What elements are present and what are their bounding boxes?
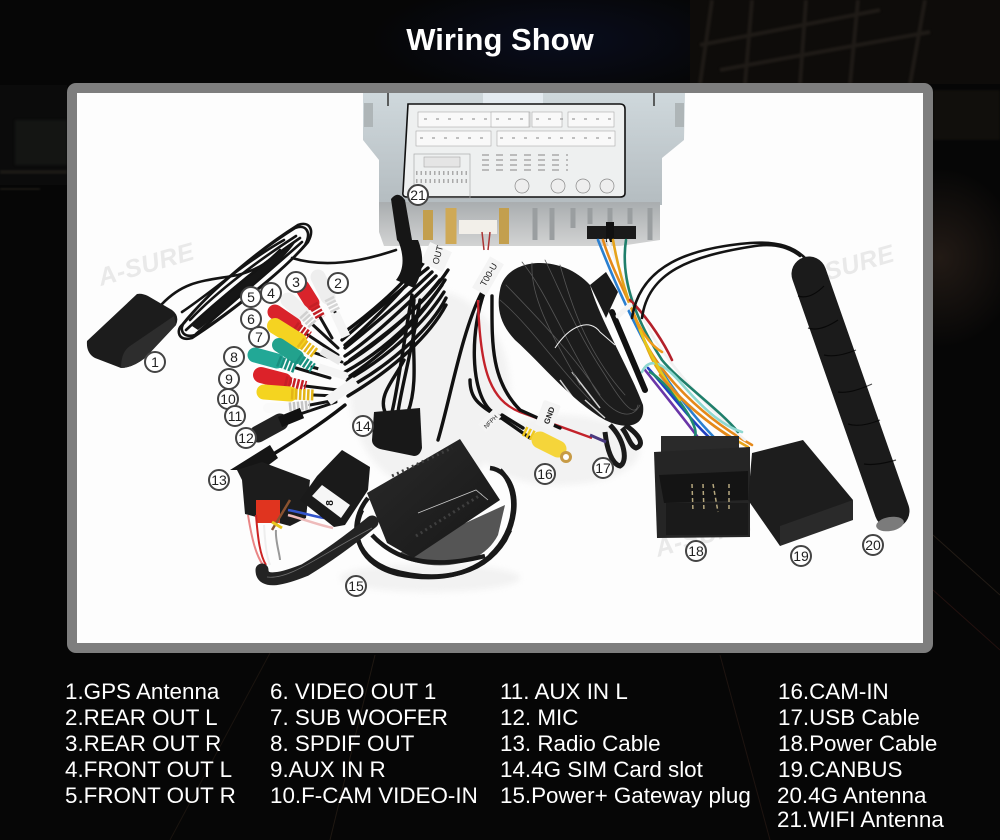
legend column 4: 19.CANBUS: [778, 757, 902, 782]
numbered badges: 17: [595, 460, 611, 476]
numbered badges: 10: [220, 391, 236, 407]
legend column 2: 8. SPDIF OUT: [270, 731, 415, 756]
legend column 1: 2.REAR OUT L: [65, 705, 218, 730]
legend column 1: [65, 679, 236, 808]
white plug cluster: [459, 220, 497, 250]
numbered badges: 11: [228, 408, 242, 424]
legend column 1: 3.REAR OUT R: [65, 731, 221, 756]
legend column 3: 13. Radio Cable: [500, 731, 661, 756]
legend column 3: 15.Power+ Gateway plug: [500, 783, 751, 808]
4G antenna foam stick (20): [798, 274, 905, 533]
numbered badges: 5: [247, 289, 255, 305]
watermarks: [94, 237, 898, 563]
label tag: OUT: OUT: [431, 244, 445, 265]
gateway coiled cable and box (15): [262, 439, 514, 579]
numbered badges: 7: [255, 329, 263, 345]
plug 6: yellow: [275, 326, 316, 354]
harness label tag T00-U: T00-U: [478, 261, 499, 288]
RCA plugs and mic jack: [255, 277, 359, 434]
watermarks: A-SURE: [94, 237, 198, 292]
legend column 1: 1.GPS Antenna: [65, 679, 220, 704]
CANBUS box (19): [748, 440, 853, 546]
numbered badges: 8: [230, 349, 238, 365]
legend column 4: 18.Power Cable: [778, 731, 937, 756]
watermarks: A-SURE: [651, 508, 755, 563]
legend column 2: 7. SUB WOOFER: [270, 705, 448, 730]
USB cable coil (17): [499, 260, 643, 466]
power cable connector (18): [654, 436, 750, 538]
harness label tag T00-U: [472, 256, 504, 296]
main harness cable bundle: [342, 240, 452, 396]
head unit: [363, 93, 685, 250]
gateway plug block with white 8 label: 8: [325, 500, 336, 506]
plug 11: white: [268, 405, 310, 408]
NFPH label: NFPH: [484, 415, 499, 430]
numbered badges: 12: [238, 430, 254, 446]
SIM card slot box and its cables (14): [372, 295, 422, 456]
legend column 1: 5.FRONT OUT R: [65, 783, 236, 808]
legend column 4: [777, 679, 944, 832]
plug 7: teal: [279, 345, 313, 368]
label tag: OUT: [421, 242, 452, 272]
GND label: GND: [542, 405, 557, 425]
numbered badges: 14: [355, 418, 371, 434]
numbered badges: 21: [410, 187, 426, 203]
numbered badges: 3: [292, 274, 300, 290]
legend column 3: 12. MIC: [500, 705, 578, 730]
numbered badges: [145, 185, 883, 596]
legend column 3: [500, 679, 751, 808]
watermarks: A-SURE: [794, 239, 898, 294]
plug 12: mic jack: [258, 413, 302, 434]
long thin cables to camera input: [438, 256, 592, 440]
legend column 4: 16.CAM-IN: [778, 679, 889, 704]
rear connector panel: [379, 202, 660, 246]
legend column 1: 4.FRONT OUT L: [65, 757, 232, 782]
WiFi antenna cables to 4G antenna: [632, 243, 805, 318]
white labels on the RCA leads: [317, 311, 359, 405]
legend column 3: 14.4G SIM Card slot: [500, 757, 704, 782]
numbered badges: 19: [793, 548, 809, 564]
plug 8: teal: [255, 355, 296, 368]
numbered badges: 6: [247, 311, 255, 327]
camera input RCA (16): [478, 400, 572, 463]
title: Wiring Show: [406, 22, 595, 57]
plug 4: white: [288, 300, 313, 325]
panel: wiring photo frame: [67, 83, 933, 653]
radio cable connector block (13): [230, 445, 333, 565]
plug 3: red: [302, 287, 321, 318]
gateway plug block with white 8 label: [300, 450, 370, 527]
numbered badges: 18: [688, 543, 704, 559]
numbered badges: 13: [211, 472, 227, 488]
black harness socket: [587, 222, 636, 242]
legend column 4: 21.WIFI Antenna: [777, 807, 944, 832]
numbered badges: 16: [537, 466, 553, 482]
soft floor shadows: [340, 290, 640, 592]
numbered badges: 4: [267, 285, 275, 301]
cable running to the radio connector: [243, 405, 345, 472]
numbered badges: 2: [334, 275, 342, 291]
GPS antenna body: [87, 294, 177, 368]
numbered badges: 1: [151, 354, 159, 370]
plug 5: red: [275, 312, 309, 336]
legend column 4: 20.4G Antenna: [777, 783, 927, 808]
legend column 3: 11. AUX IN L: [500, 679, 628, 704]
legend column 2: 6. VIDEO OUT 1: [270, 679, 436, 704]
numbered badges: 20: [865, 537, 881, 553]
WiFi stub antenna (21): [391, 195, 412, 245]
legend: [65, 679, 944, 832]
plug 2: white: [318, 277, 336, 312]
colored power harness wires: [598, 240, 752, 448]
wiring sticker: [403, 104, 625, 198]
legend column 4: 17.USB Cable: [778, 705, 920, 730]
head unit chassis: [363, 93, 685, 205]
plug 10: yellow: [264, 392, 314, 395]
legend column 2: 9.AUX IN R: [270, 757, 386, 782]
plug 9: red: [261, 375, 306, 386]
numbered badges: 15: [348, 578, 364, 594]
GPS antenna cable loops: [162, 224, 396, 339]
brass antenna connectors: [428, 208, 504, 244]
legend column 2: 10.F-CAM VIDEO-IN: [270, 783, 478, 808]
legend column 2: [270, 679, 478, 808]
numbered badges: 9: [225, 371, 233, 387]
